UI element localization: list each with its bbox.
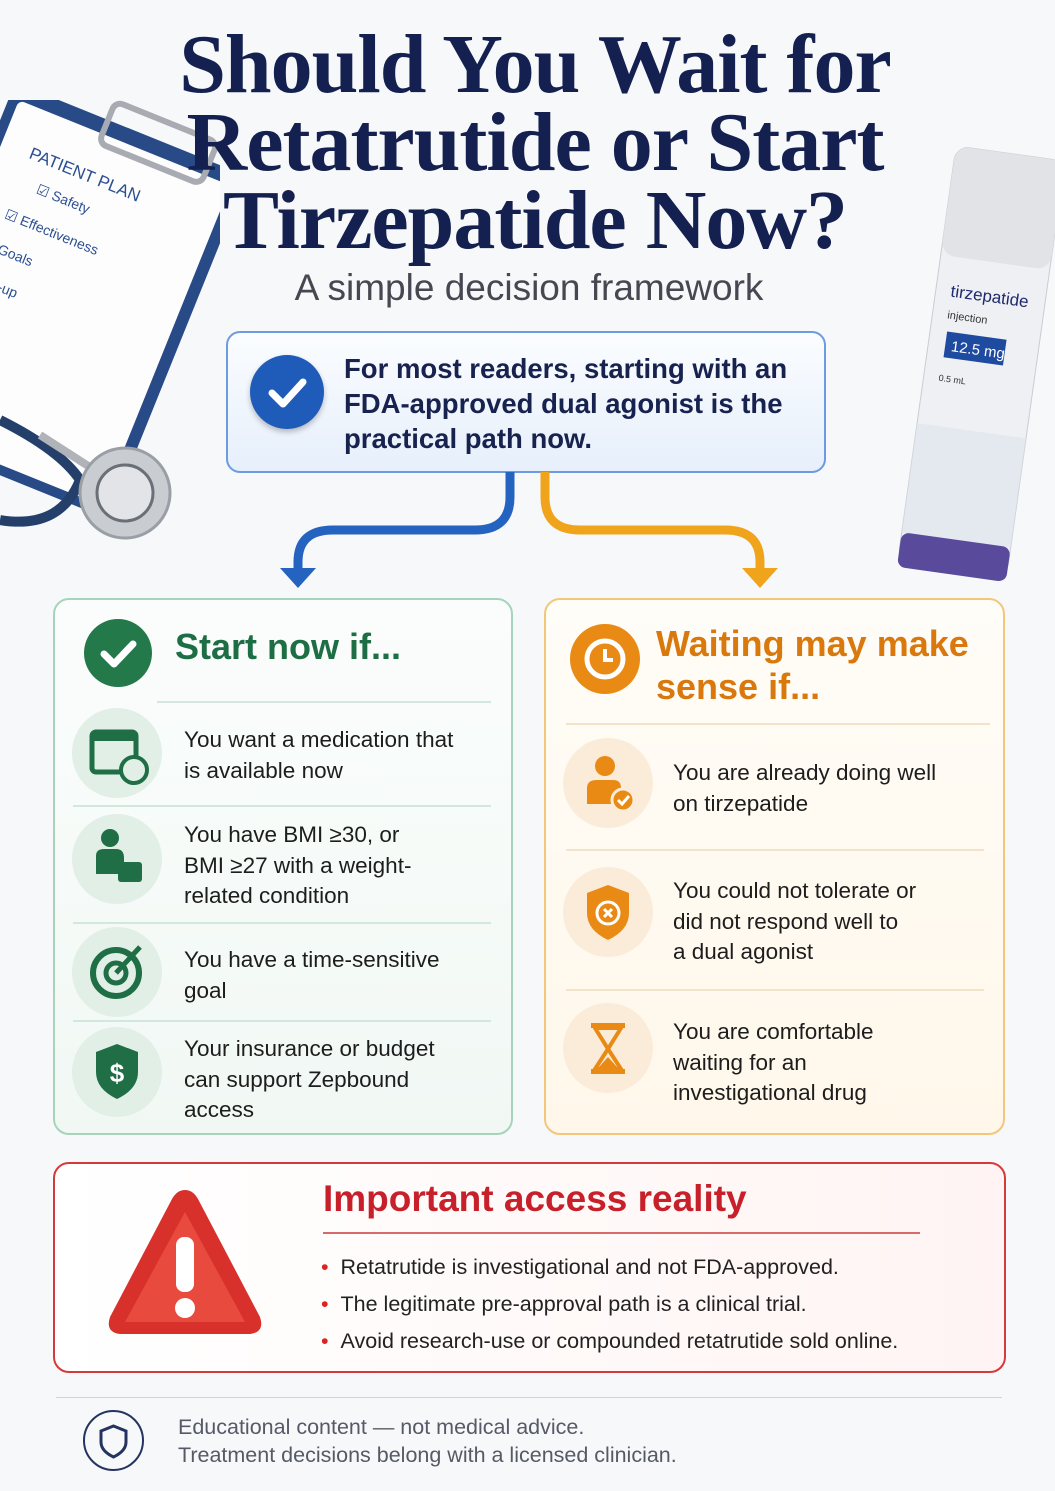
- title: Should You Wait for: [179, 18, 891, 111]
- title: Retatrutide or Start: [187, 96, 883, 189]
- callout text: For most readers, starting with an: [344, 353, 787, 384]
- row: comfortable waiting: waiting for an: [673, 1050, 807, 1074]
- row: insurance: access: [184, 1097, 254, 1122]
- pen illustration: injection: [947, 309, 988, 327]
- footer disclaimer: Educational content — not medical advice.: [178, 1415, 584, 1439]
- pen illustration: 12.5 mg: [950, 338, 1006, 363]
- row: available now: [72, 708, 454, 798]
- callout: recommendation: [226, 331, 826, 473]
- heading: Waiting may make: [656, 623, 969, 664]
- icon: warning triangle: [108, 1190, 262, 1334]
- row: available now: is available now: [184, 758, 343, 782]
- row: not tolerate: a dual agonist: [673, 939, 813, 964]
- pen illustration: 0.5 mL: [938, 373, 967, 386]
- icon: clock: [570, 624, 640, 694]
- row: insurance: Your insurance or budget: [184, 1036, 435, 1061]
- heading: Important access reality: [323, 1178, 747, 1219]
- clipboard illustration: ☑ Effectiveness: [3, 206, 101, 258]
- icon: blue check: [250, 355, 324, 429]
- icon: green check: [84, 619, 152, 687]
- row: comfortable waiting: You are comfortable: [673, 1019, 874, 1044]
- row: BMI: [72, 814, 411, 908]
- clipboard illustration: PATIENT PLAN: [27, 144, 143, 206]
- row: BMI: related condition: [184, 883, 349, 908]
- bullet list: • Retatrutide is investigational and not FDA-approved.: [321, 1255, 839, 1279]
- row: BMI: BMI ≥27 with a weight-: [184, 852, 411, 878]
- heading: Start now if...: [175, 626, 401, 667]
- row: insurance: [72, 1027, 435, 1122]
- pen illustration: [898, 147, 1055, 581]
- heading: sense if...: [656, 666, 820, 707]
- row: goal: [72, 927, 440, 1017]
- row: not tolerate: You could not tolerate or: [673, 878, 916, 903]
- callout text: FDA-approved dual agonist is the: [344, 388, 783, 419]
- row: comfortable waiting: [563, 1003, 874, 1105]
- icon: footer shield: [83, 1410, 144, 1471]
- title: [179, 18, 891, 267]
- footer disclaimer: [178, 1415, 677, 1467]
- panel: waiting: [544, 598, 1005, 1135]
- arrow: orange to waiting: [540, 472, 778, 588]
- row: doing well: on tirzepatide: [673, 790, 808, 816]
- row: not tolerate: did not respond well to: [673, 908, 898, 934]
- row: insurance: $: [110, 1058, 125, 1088]
- row: comfortable waiting: investigational drug: [673, 1080, 867, 1105]
- row: available now: You want a medication that: [184, 727, 453, 752]
- row: doing well: [563, 738, 936, 828]
- bullet list: [321, 1255, 898, 1353]
- bullet list: • The legitimate pre-approval path is a clinical trial.: [321, 1292, 807, 1316]
- row: insurance: can support Zepbound: [184, 1066, 409, 1092]
- callout text: practical path now.: [344, 423, 592, 454]
- heading: [656, 623, 969, 707]
- bullet list: • Avoid research-use or compounded retatrutide sold online.: [321, 1329, 898, 1353]
- row: doing well: You are already doing well: [673, 760, 936, 785]
- clipboard illustration: ☑ Safety: [34, 181, 92, 217]
- row: BMI: You have BMI ≥30, or: [184, 822, 399, 847]
- pen illustration: tirzepatide: [949, 282, 1030, 311]
- arrow: blue to start now: [280, 472, 514, 588]
- row: goal: You have a time-sensitive: [184, 947, 440, 972]
- row: not tolerate: [563, 867, 916, 964]
- callout text: [344, 353, 787, 454]
- title: Tirzepatide Now?: [223, 174, 847, 267]
- clipboard illustration: [0, 100, 220, 540]
- panel: start now: [53, 598, 513, 1135]
- row: goal: goal: [184, 978, 227, 1002]
- footer disclaimer: Treatment decisions belong with a licensed clinician.: [178, 1443, 677, 1467]
- subtitle: A simple decision framework: [295, 267, 763, 308]
- panel: important access reality: [53, 1162, 1006, 1373]
